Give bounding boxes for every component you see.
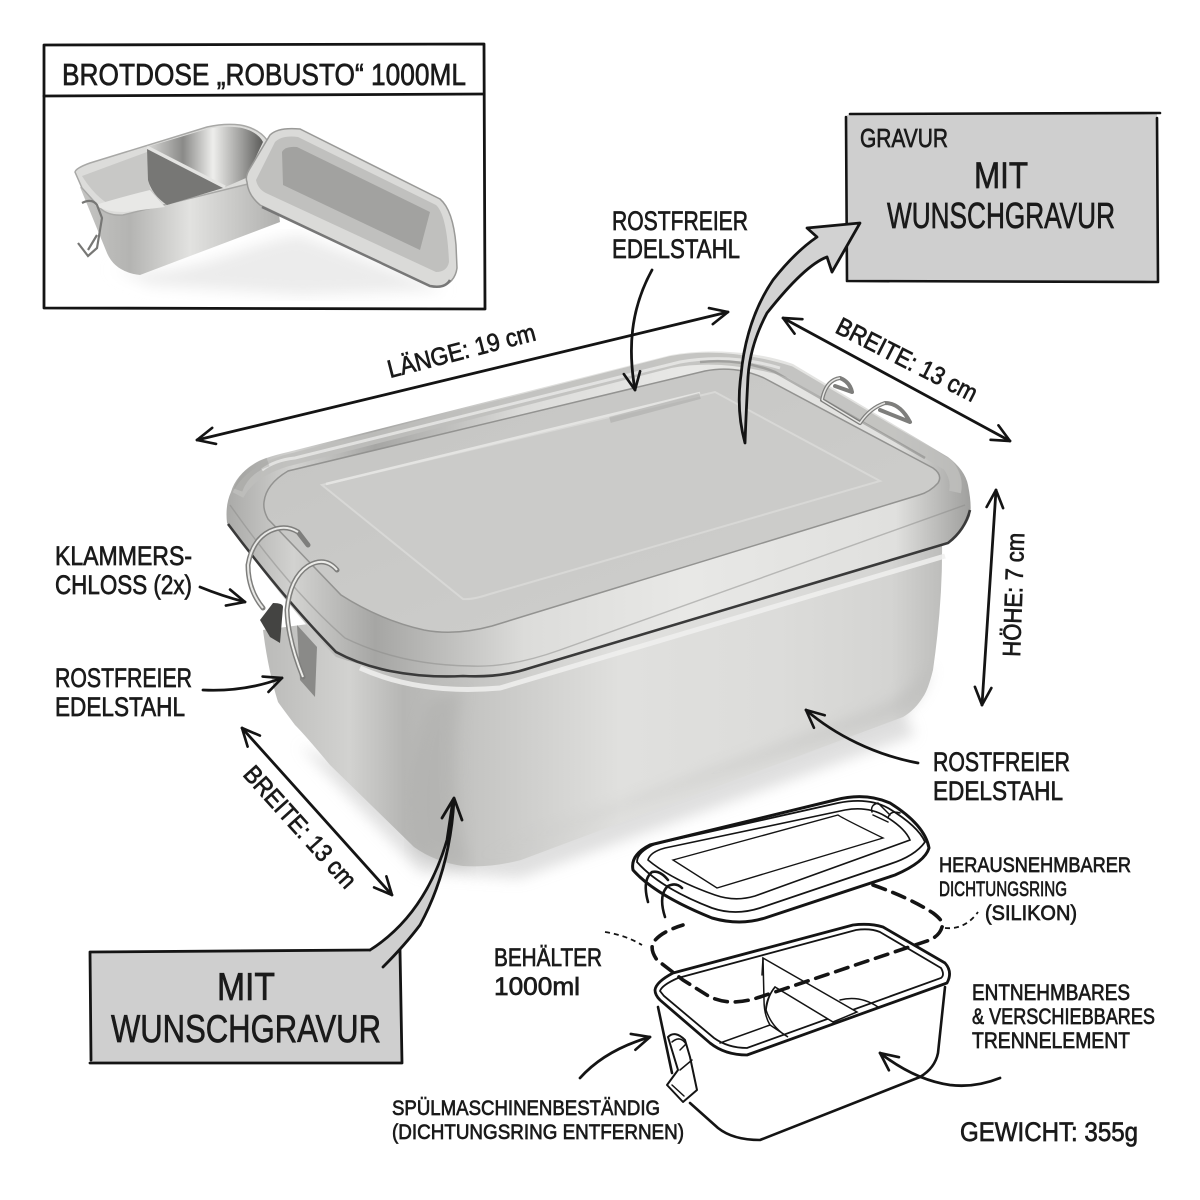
illustration: exploded lid: [633, 797, 929, 922]
box lip: [360, 556, 945, 689]
label: container: BEHÄLTER: [494, 944, 602, 972]
leader: container: [605, 932, 642, 945]
text: mit wunschgravur bottom: [111, 966, 381, 1051]
rim gap: [230, 505, 965, 666]
illustration: exploded container: [655, 924, 950, 1141]
label: stainless steel left: ROSTFREIER: [55, 663, 192, 693]
label: divider: [972, 980, 1155, 1053]
label: stainless steel left: [55, 663, 192, 722]
lid panel: [264, 369, 940, 632]
label: gravur: GRAVUR: [860, 123, 948, 153]
arrow: dishwasher: [580, 1037, 650, 1078]
text: mit wunschgravur bottom: MIT: [217, 966, 275, 1009]
label: seal: DICHTUNGSRING: [939, 878, 1067, 901]
label: container: 1000ml: [494, 973, 580, 1001]
lid emboss: [322, 392, 880, 599]
label: container: [494, 944, 602, 1001]
dimension: length label: LÄNGE: 19 cm: [384, 319, 539, 384]
label: seal: [939, 854, 1131, 925]
box body: [263, 540, 942, 866]
label: clasp: [55, 541, 192, 600]
divider: [763, 958, 857, 1037]
label: stainless steel body: EDELSTAHL: [933, 776, 1063, 806]
arrow: stainless steel top: [631, 270, 652, 390]
front clips: [248, 528, 337, 697]
lid outer: [226, 351, 971, 678]
label: dishwasher: (DICHTUNGSRING ENTFERNEN): [392, 1121, 684, 1144]
panel: engraving callout bottom: [90, 798, 462, 1063]
leader: seal: [945, 912, 978, 928]
label: clasp: KLAMMERS-: [55, 541, 192, 571]
heading: product name: BROTDOSE „ROBUSTO“ 1000ML: [62, 57, 466, 92]
seam: [228, 510, 970, 676]
text: mit wunschgravur: [887, 155, 1115, 236]
text: mit wunschgravur: WUNSCHGRAVUR: [887, 195, 1115, 236]
label: seal: HERAUSNEHMBARER: [939, 854, 1131, 877]
dimension: width right arrow: [783, 318, 1010, 441]
arrow: engraving bottom: [370, 798, 462, 967]
dimension: width left arrow: [242, 728, 392, 895]
arrow: stainless steel left: [203, 678, 282, 690]
shadow: [300, 705, 915, 878]
label: dishwasher: [392, 1097, 684, 1144]
label: stainless steel top: ROSTFREIER: [612, 206, 748, 236]
panel: engraving callout top: [846, 113, 1160, 282]
label: divider: ENTNEHMBARES: [972, 980, 1130, 1005]
label: dishwasher: SPÜLMASCHINENBESTÄNDIG: [392, 1097, 660, 1120]
arrow: divider: [880, 1053, 1000, 1086]
arrow: clasp: [200, 587, 245, 602]
label: divider: & VERSCHIEBBARES: [972, 1004, 1155, 1029]
panel: product overview: [44, 44, 485, 309]
illustration: main lunch box: [226, 351, 971, 878]
back rim highlights: [262, 359, 780, 470]
back clips: [822, 378, 910, 423]
text: mit wunschgravur bottom: WUNSCHGRAVUR: [111, 1008, 381, 1051]
arrow: engraving up: [739, 223, 860, 443]
label: clasp: CHLOSS (2x): [55, 570, 192, 600]
latch: [667, 1034, 697, 1102]
dimension: height arrow: [982, 490, 996, 705]
dimension: length arrow: [197, 312, 728, 440]
label: stainless steel top: EDELSTAHL: [612, 234, 740, 264]
label: divider: TRENNELEMENT: [972, 1028, 1130, 1053]
photo: open lunch box: [75, 124, 457, 295]
label: stainless steel body: [933, 747, 1070, 806]
label: stainless steel body: ROSTFREIER: [933, 747, 1070, 777]
illustration: dashed silicone seal: [652, 885, 943, 1002]
label: stainless steel top: [612, 206, 748, 264]
label: stainless steel left: EDELSTAHL: [55, 692, 185, 722]
arrow: stainless steel body: [806, 710, 918, 763]
dimension: height label: HÖHE: 7 cm: [998, 532, 1030, 657]
dimension: width right label: BREITE: 13 cm: [831, 312, 982, 408]
text: mit wunschgravur: MIT: [974, 155, 1028, 196]
label: weight: GEWICHT: 355g: [960, 1117, 1138, 1147]
back rim: [238, 359, 956, 495]
dimension: width left label: BREITE: 13 cm: [238, 760, 362, 894]
label: seal: (SILIKON): [985, 902, 1077, 925]
